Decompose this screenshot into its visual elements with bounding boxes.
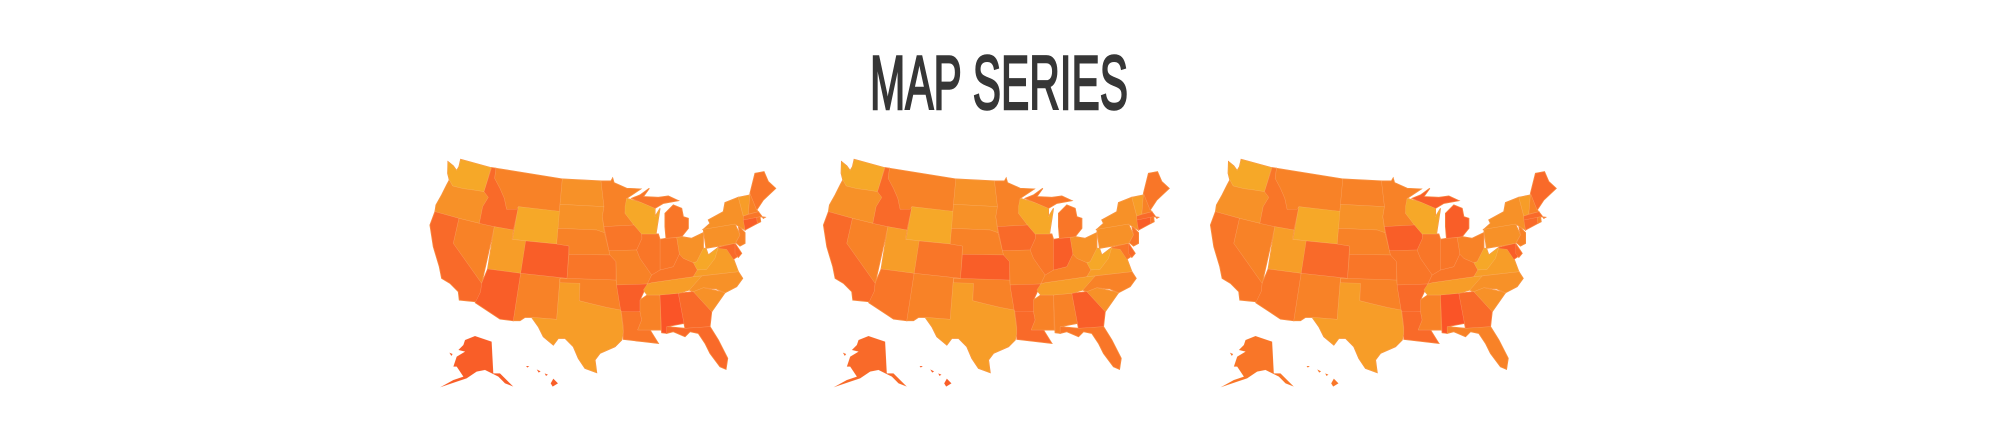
map 2 <box>823 159 1169 387</box>
map 3 <box>1210 159 1556 387</box>
map 1 <box>430 159 776 387</box>
title: MAP SERIES <box>870 41 1128 126</box>
